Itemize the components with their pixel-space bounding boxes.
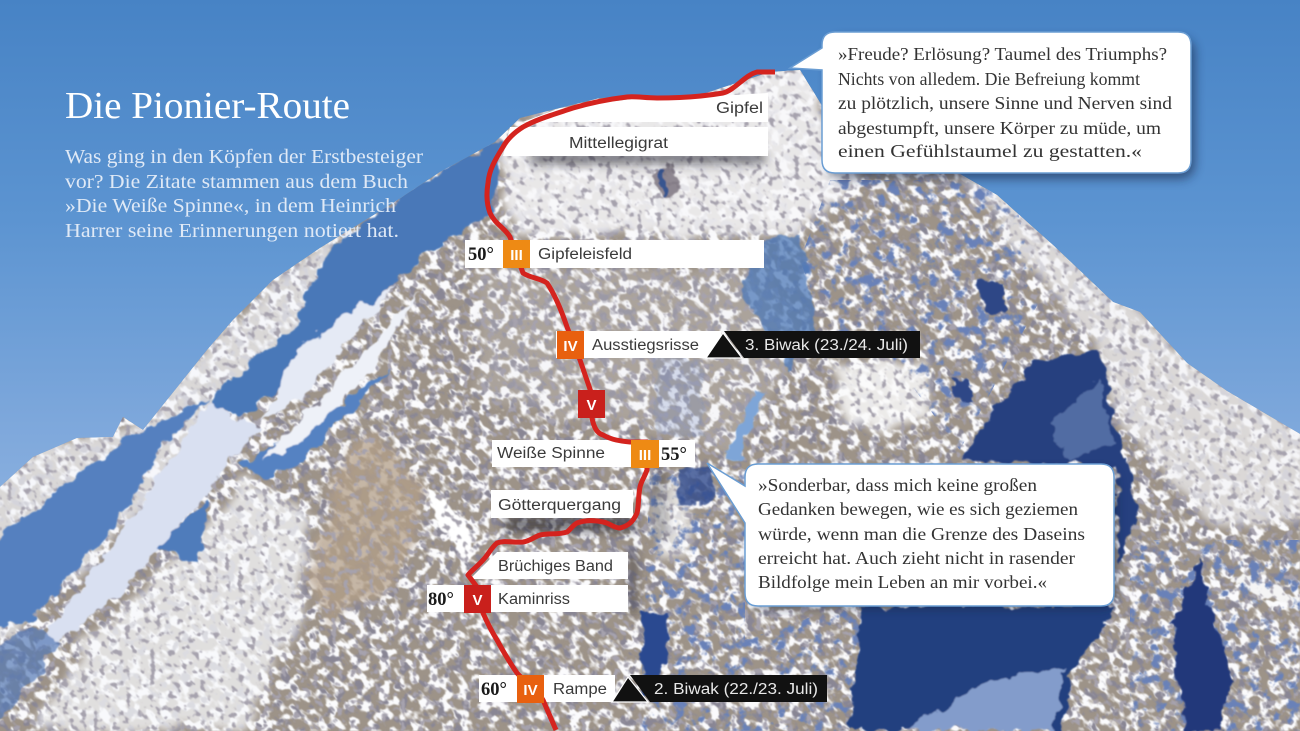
quote bubble top: einen Gefühlstaumel zu gestatten.« <box>838 141 1142 161</box>
label: Brüchiges Band <box>470 552 628 579</box>
dark blue crags <box>640 180 1300 731</box>
bivouac 3 label: 3. Biwak (23./24. Juli) <box>745 337 908 354</box>
quote bubble bottom: »Sonderbar, dass mich keine großen <box>758 475 1037 495</box>
grade marker V: V <box>586 397 597 414</box>
label: Gipfel <box>523 93 768 122</box>
bivouac 2 label: 2. Biwak (22./23. Juli) <box>654 681 818 698</box>
label: Brüchiges Band: Brüchiges Band <box>498 558 613 575</box>
grade marker III at Gipfeleisfeld <box>503 240 530 268</box>
bivouac 2 label <box>612 675 827 702</box>
label: Weiße Spinne <box>492 440 695 467</box>
grade marker V <box>578 390 605 418</box>
label: Gipfeleisfeld: Gipfeleisfeld <box>538 246 632 263</box>
label: Kaminriss: Kaminriss <box>498 591 570 608</box>
intro text: vor? Die Zitate stammen aus dem Buch <box>65 171 408 193</box>
label: Mittellegigrat: Mittellegigrat <box>569 135 669 152</box>
quote bubble top: »Freude? Erlösung? Taumel des Triumphs? <box>838 44 1167 64</box>
quote bubble bottom: würde, wenn man die Grenze des Daseins <box>758 524 1085 544</box>
grade marker V at Kaminriss: V <box>472 592 483 609</box>
quote bubble bottom: Bildfolge mein Leben an mir vorbei.« <box>758 572 1047 592</box>
quote bubble top: abgestumpft, unsere Körper zu müde, um <box>838 118 1161 138</box>
climbing route line <box>468 72 775 730</box>
quote bubble top: zu plötzlich, unsere Sinne und Nerven sind <box>838 93 1172 113</box>
quote bubble top <box>790 32 1195 179</box>
label: Götterquergang <box>491 490 633 518</box>
intro text: Harrer seine Erinnerungen notiert hat. <box>65 220 399 242</box>
label: Weiße Spinne: Weiße Spinne <box>497 445 605 462</box>
intro text <box>65 146 423 242</box>
shadows behind labels <box>505 152 765 614</box>
grade marker V at Kaminriss <box>464 585 491 613</box>
quote bubble top: Nichts von alledem. Die Befreiung kommt <box>838 69 1140 89</box>
intro text: »Die Weiße Spinne«, in dem Heinrich <box>65 195 396 217</box>
grade marker IV at Rampe <box>517 675 544 703</box>
grade marker III at Weiße Spinne <box>631 440 659 468</box>
tan rock wall <box>310 427 427 633</box>
label: Götterquergang: Götterquergang <box>498 497 621 514</box>
label: Rampe: Rampe <box>553 681 607 698</box>
grade marker IV at Rampe: IV <box>523 682 538 699</box>
angle 50 degrees: 50° <box>468 245 494 265</box>
deep shadows on right face <box>640 166 1233 731</box>
bivouac 3 label <box>706 331 920 358</box>
label: Ausstiegsrisse: Ausstiegsrisse <box>592 337 699 354</box>
grade marker III at Gipfeleisfeld: III <box>510 247 523 264</box>
quote bubble bottom: Gedanken bewegen, wie es sich geziemen <box>758 499 1078 519</box>
grade marker IV at Ausstiegsrisse: IV <box>563 338 578 355</box>
intro text: Was ging in den Köpfen der Erstbesteiger <box>65 146 423 168</box>
grade marker III at Weiße Spinne: III <box>639 447 651 464</box>
label: Gipfeleisfeld <box>465 240 764 268</box>
title: Die Pionier-Route <box>65 85 350 127</box>
label: Ausstiegsrisse <box>556 331 721 358</box>
grade marker IV at Ausstiegsrisse <box>557 331 584 359</box>
quote bubble bottom: erreicht hat. Auch zieht nicht in rasender <box>758 548 1075 568</box>
angle 80 degrees: 80° <box>428 590 454 610</box>
label: Kaminriss <box>427 585 628 612</box>
shaded snow on left flank <box>0 140 500 731</box>
label: Mittellegigrat <box>503 127 768 156</box>
angle 60 degrees: 60° <box>481 680 507 700</box>
label: Rampe <box>479 675 615 702</box>
label: Gipfel: Gipfel <box>716 100 763 117</box>
quote bubble bottom <box>707 463 1117 609</box>
angle 55 degrees: 55° <box>661 445 687 465</box>
